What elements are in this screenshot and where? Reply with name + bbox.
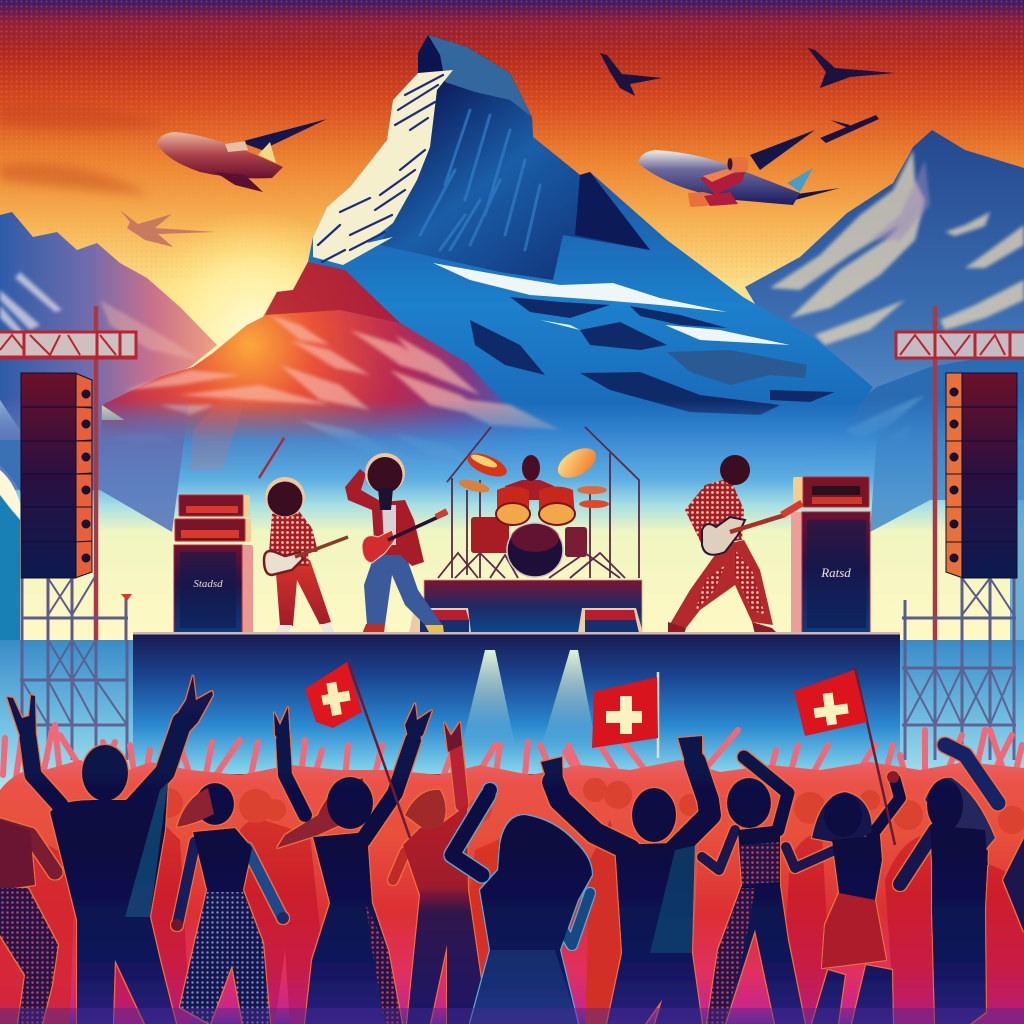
right-edge arm	[1003, 838, 1024, 932]
left amplifier stack	[174, 495, 253, 633]
Swiss flag left	[305, 662, 410, 838]
right lighting truss and speaker tower	[896, 306, 1024, 640]
side right shading	[1010, 440, 1024, 640]
legs	[275, 560, 331, 626]
scaffold	[902, 578, 1016, 640]
drum kit with drummer	[438, 427, 639, 578]
far-left dancer	[0, 820, 58, 1024]
dancer with ponytail	[171, 783, 289, 1024]
plane left	[157, 119, 327, 192]
mic stand	[259, 438, 284, 478]
sunlit snowy ridge	[313, 70, 453, 265]
summit cap	[428, 35, 532, 117]
Swiss flag right	[794, 668, 895, 845]
flared trousers	[670, 540, 773, 628]
left distant mountains	[0, 212, 217, 490]
small aircraft silhouettes	[120, 48, 895, 247]
speaker stack	[21, 373, 92, 578]
dancer with long hair far right	[900, 745, 998, 1024]
rocky outcrop	[667, 350, 807, 385]
right distant mountains	[745, 130, 1024, 490]
red shirted dancer behind	[393, 722, 483, 1024]
scaffold	[22, 575, 128, 640]
dancer with long hair, arms raised	[274, 703, 432, 1024]
drum riser and floor monitors	[409, 580, 643, 634]
tent beam	[190, 395, 245, 470]
pole	[933, 306, 937, 640]
dancer in sparkling top	[702, 757, 805, 1024]
bass drum	[507, 523, 563, 577]
dark forest patches	[470, 297, 835, 415]
stands	[438, 427, 639, 578]
cymbals	[464, 449, 510, 481]
red guitar	[362, 530, 395, 563]
side drums	[471, 517, 509, 553]
drummer	[505, 480, 554, 500]
afro	[365, 453, 405, 493]
speaker stack	[946, 373, 1017, 578]
jeans	[364, 553, 443, 632]
guitar	[264, 551, 303, 575]
hat finial	[121, 594, 132, 601]
man with raised fists right	[541, 736, 710, 1024]
truss	[0, 331, 136, 359]
midground crowd silhouettes	[0, 778, 1024, 1024]
ridge shadow streaks	[318, 75, 443, 262]
Matterhorn main mountain	[102, 35, 873, 470]
stage backdrop glow	[0, 395, 1024, 640]
right amplifier stack	[791, 477, 870, 633]
ridge red shadow	[265, 262, 400, 323]
central woman with long hair	[452, 783, 592, 1024]
Swiss flag centre	[592, 672, 658, 758]
torso and jacket	[345, 469, 424, 566]
pole	[94, 306, 98, 640]
guitarist right	[668, 455, 802, 634]
face rock texture	[420, 110, 540, 250]
bottom vignette	[0, 1008, 1024, 1024]
guitar	[702, 517, 745, 555]
background crowd raised arms	[0, 725, 1024, 1024]
dancer in red dress	[786, 771, 900, 1024]
truss	[896, 331, 1024, 359]
torso	[268, 508, 318, 566]
guitarist left	[259, 438, 348, 634]
tom drums	[497, 486, 529, 517]
side left shading	[0, 395, 190, 532]
checked shirt	[685, 478, 744, 545]
sky background	[0, 0, 1024, 420]
afro	[265, 477, 305, 517]
lower left sunset slope	[102, 262, 590, 470]
front man raising horns left	[7, 675, 213, 1024]
brand script: Ratsd	[820, 565, 851, 580]
shadow north face	[380, 35, 650, 280]
brand script: Stadsd	[193, 578, 223, 590]
plane right	[638, 130, 840, 207]
guitarist centre	[345, 453, 447, 634]
left lighting truss and speaker tower	[0, 306, 136, 640]
right face light snow band	[433, 263, 790, 345]
snow streaks left slope	[110, 315, 560, 465]
head	[720, 455, 750, 485]
stage platform	[0, 632, 1024, 790]
front foothill	[787, 350, 1024, 490]
